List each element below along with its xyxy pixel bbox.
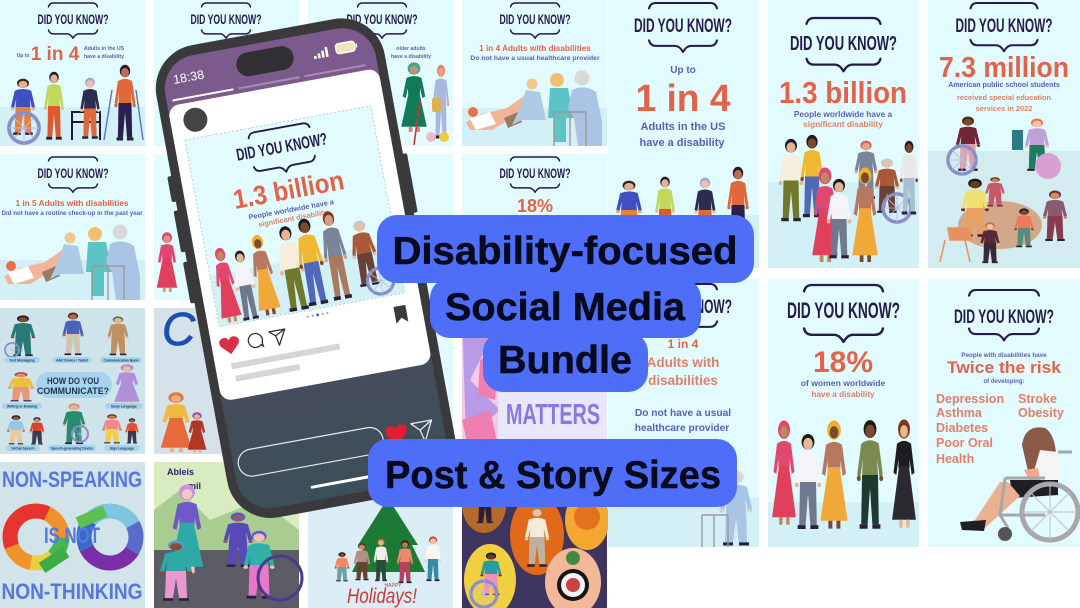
illustration: care scene [4,224,140,300]
panel: ableism illustration [154,462,302,608]
illustration: costumed characters in colored blobs [462,477,609,608]
label: disability-focused social media bundle [377,215,754,392]
panel: tile 1 in 5 adults [0,154,145,300]
home bar [310,475,370,489]
heading: did you know: DID YOU KNOW? [190,12,262,27]
illustration: children around tree [335,536,441,583]
method labels: Verbal Speech [11,446,35,450]
heading: did you know: DID YOU KNOW? [787,298,900,323]
speech pill: how do you communicate: COMMUNICATE? [37,386,109,396]
list of conditions: Poor Oral [936,436,993,450]
icon: send [411,420,435,443]
stat text: 1 in 4 [636,78,730,120]
method labels: Body Language [111,404,137,408]
post illustration [206,202,396,325]
stat text: People worldwide have a [794,109,892,119]
label: post and story sizes: Post & Story Sizes [385,454,721,497]
panel: story 18 percent [768,279,919,547]
speech pill: how do you communicate [36,372,112,398]
stat text [635,337,731,434]
caption: older adults: have a disability [391,54,431,60]
heading: did you know: DID YOU KNOW? [634,16,732,37]
text: ableism: mil [188,481,201,491]
method labels: Communication Book [103,358,139,362]
list of conditions: Stroke [1018,392,1057,406]
post stat: 1.3 billion [231,165,346,215]
heading: did you know: DID YOU KNOW? [346,12,418,27]
post card [168,68,432,402]
list of conditions: Diabetes [936,421,988,435]
panel: tile hidden below phone [308,308,453,454]
phone body [149,11,463,525]
illustration: diverse group [779,135,918,262]
panel: tile 18 percent [462,154,607,300]
panel: non-speaking is not non-thinking [0,462,145,608]
caption: older adults: older adults [396,46,426,52]
stat: 1 in 4: Adults in the US [84,46,125,52]
stat text [636,65,730,149]
method labels: AAC Device / Tablet [56,358,89,362]
phone screen [159,23,453,514]
icon: comment [247,332,264,349]
stat text: have a disability [640,137,725,149]
text: non-speaking: NON-SPEAKING [2,467,142,492]
panel: tile with script C: C [162,303,196,355]
heading: did you know: DID YOU KNOW? [634,297,732,318]
panel: story 1 in 4 adults [608,0,759,268]
illustration: care scene [466,70,602,146]
text: ableism: Ableis [167,467,194,477]
post caption: significant disability [257,207,329,229]
stat text: disabilities [648,373,718,388]
stat: 1 in 4: have a disability [84,54,124,60]
illustration: woman in wheelchair [960,427,1078,541]
stat text: have a disability [811,390,875,399]
status time: 18:38 [172,68,205,87]
stat text: services in 2022 [976,104,1032,113]
text: ableism [167,467,201,491]
panel: tile 1 in 4 adults [0,0,145,146]
panel: tile behind phone top [154,0,299,146]
icon: heart outline area [385,424,409,446]
stat text: Do not have a usual healthcare provider [470,55,600,62]
intro text: of developing: [984,379,1024,385]
list of conditions [936,392,1064,466]
illustration: friends waving [161,392,206,453]
caption: older adults [391,46,431,60]
heading: did you know: DID YOU KNOW? [500,12,570,27]
list of conditions: Obesity [1018,406,1064,420]
icon: battery [335,40,358,54]
text: is not: IS NOT [44,523,100,548]
stat text: Adults in the US [641,121,725,133]
stat text: received special education [957,93,1052,102]
stat text: Up to [670,65,696,76]
stat text: Adults with [647,355,719,370]
avatar [181,106,209,134]
illustration: christmas tree [352,498,425,572]
stat text: healthcare provider [635,423,729,434]
post heading: DID YOU KNOW? [235,129,329,165]
stat text: Did not have a routine check-up in the past year [2,210,143,217]
illustration: five women [772,420,916,529]
icon: rainbow infinity [10,511,136,568]
stat text [470,44,600,62]
stat text [2,198,143,217]
list of conditions: Asthma [936,406,983,420]
icon: signal [313,47,329,59]
panel: story twice the risk [928,279,1080,547]
intro text: Twice the risk [947,359,1062,377]
label: disability-focused social media bundle: Disability-focused [392,230,738,273]
list of conditions: Health [936,452,974,466]
label: disability-focused social media bundle: Bundle [498,339,632,382]
stat text: 1.3 billion [779,75,907,110]
stat text: 18% [813,346,873,379]
phone mockup [145,10,467,526]
icon: heart [218,335,241,356]
panel: tile matters [462,308,607,454]
stat: 18%: 18% [517,196,553,216]
panel: tile with script C [154,303,299,454]
post image [185,106,405,327]
panel: how do you communicate [0,308,145,454]
stat: 1 in 4: Up to [17,53,29,59]
heading: did you know: DID YOU KNOW? [790,32,897,55]
intro text [947,352,1062,385]
icon: bookmark [393,305,408,324]
icon: share [269,329,287,347]
text: happy holidays: Holidays! [347,585,417,608]
stat text: of women worldwide [801,378,885,388]
stat text: 1 in 4 [668,337,699,351]
stat text: Do not have a usual [635,408,731,419]
illustration: older adults with cane and dog [401,62,449,145]
stat: 1 in 4 [17,44,125,65]
stat text: 7.3 million [939,52,1069,84]
illustration: four adults [616,167,749,242]
label: disability-focused social media bundle: Social Media [445,286,686,329]
intro text: People with disabilities have [961,352,1047,359]
text: matters: MATTERS [506,399,600,431]
panel: story healthcare provider [608,279,759,547]
dynamic island [234,44,296,78]
panel: halloween costumes [462,462,609,608]
illustration: skaters and wheelchair user [160,484,302,601]
method labels: Text Messaging [9,358,35,362]
post caption: People worldwide have a [248,197,335,222]
panel: story 7.3 million [928,0,1080,268]
illustration: elder with walker [702,471,752,547]
text: non-thinking: NON-THINKING [2,579,142,604]
method labels [2,357,143,451]
illustration: four adults with mobility aids [9,65,143,143]
stat text: 1 in 5 Adults with disabilities [15,198,129,208]
story progress bars [172,64,366,102]
stat text: significant disability [803,119,883,129]
method labels: Sign Language [110,446,134,450]
label: post and story sizes [368,439,737,507]
panel: happy holidays [308,462,453,608]
illustration: communication figures [5,312,140,444]
stat text [801,346,885,399]
panel: tile older adults [308,0,453,146]
stat text [779,75,907,129]
stat text: 1 in 4 Adults with disabilities [479,44,591,53]
carousel dots [307,311,329,318]
panel: tile hidden right of phone [308,154,453,300]
heading: did you know: DID YOU KNOW? [38,166,108,181]
heading: did you know: DID YOU KNOW? [500,166,570,181]
heading: did you know: DID YOU KNOW? [38,12,108,27]
list of conditions: Depression [936,392,1004,406]
panel: tile usual healthcare provider [462,0,607,146]
side buttons [167,133,427,304]
stat text: American public school students [948,81,1060,89]
illustration: students and table [940,117,1067,263]
method labels: Writing or Drawing [7,404,37,408]
message input [236,425,385,478]
stat: 1 in 4: 1 in 4 [31,44,80,65]
method labels: Speech-generating Device [51,446,93,450]
stat text [939,52,1069,113]
speech pill: how do you communicate: HOW DO YOU [47,376,99,386]
caption placeholder bars [231,343,343,382]
text: happy holidays: HAPPY [385,583,402,589]
panel: tile behind phone middle [154,154,299,300]
panel: story 1.3 billion [768,0,919,268]
